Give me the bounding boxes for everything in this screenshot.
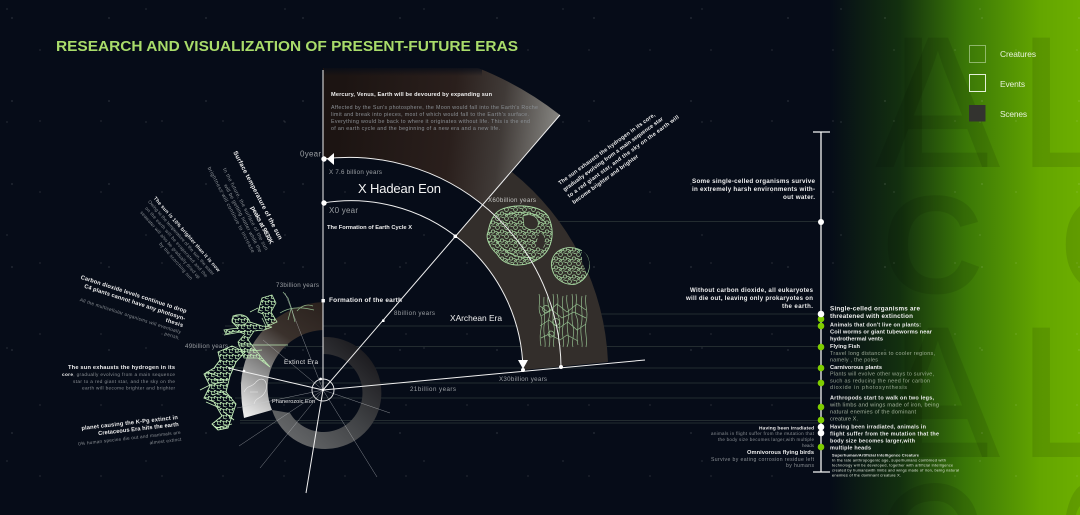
rotated note: sun temperature: will be getting hotter while the (222, 183, 263, 254)
event: irradiated animals: multiple heads (830, 446, 871, 452)
legend: events: Events (1000, 79, 1025, 89)
scene: Archean band (455, 172, 608, 370)
event: superhuman: In the late anthropogenic age, superhumans combined with (832, 458, 946, 462)
rotated note: carbon dioxide: C4 plants cannot have any photosyn- (83, 284, 186, 322)
diagram labels: X30billion years (499, 376, 547, 383)
event: carnivorous plants: such as reducing the need for carbon (830, 378, 930, 384)
diagram labels: X Hadean Eon (358, 181, 441, 196)
event: irradiated animals: flight suffer from the mutation that the (830, 432, 939, 438)
event: single-celled extinction: threatened with extinction (830, 313, 913, 320)
diagram labels: The Formation of Earth Cycle X (327, 225, 412, 231)
rotated note: K-Pg extinction: planet causing the K-Pg extinct in (81, 415, 179, 432)
event: carnivorous plants: Plants will evolve other ways to survive, (830, 372, 934, 378)
Sun expansion scene text: Everything would be back to where it originates without life. This is the end (331, 119, 530, 125)
scene: Hadean sector (323, 68, 560, 205)
event: animals without plants: Animals that don't live on plants: (830, 322, 921, 328)
event: arthropods: with limbs and wings made of iron, being (829, 402, 939, 408)
timeline note: without carbon dioxide: the earth. (782, 303, 813, 310)
event: irradiated animals: Having been irradiated, animals in (830, 424, 927, 430)
scene: Phanerozoic ring, lower part (272, 337, 381, 449)
background watermark letters: C (882, 166, 983, 323)
rotated note: brighter sun: on the earth will be evaporated and the (144, 206, 209, 279)
diagram labels: Extinct Era (284, 359, 318, 366)
timeline arcs (323, 157, 561, 367)
Sun expansion scene text: of an earth cycle and the beginning of a new era and a new life. (331, 126, 500, 132)
rotated note: K-Pg extinction (76, 415, 182, 453)
diagram labels: Formation of the earth (329, 297, 402, 304)
note: hydrogen exhausted, left: star to a red giant star, and the sky on the (73, 379, 175, 384)
event: superhuman: Superhuman/Artificial Intelligence Creature (832, 452, 920, 458)
legend: scenes: Scenes (1000, 109, 1027, 119)
legend (969, 46, 1036, 122)
event: animals without plants: Coil worms or giant tubeworms near (830, 330, 933, 336)
diagram labels: X 7.6 billion years (329, 169, 382, 176)
rotated note: brighter sun: The sun is 10% brighter than it is now (152, 196, 221, 273)
background watermark letters: A (875, 0, 1001, 207)
Sun expansion scene text: limit and break into pieces, most of which would fall to the Earth's surface. (331, 112, 529, 118)
event: single-celled extinction (830, 306, 920, 320)
rotated note: brighter sun: Owing to the temperature of the sun, the water (147, 199, 216, 277)
rotated note: K-Pg extinction: 0% human species die out and mammals are (78, 430, 181, 446)
rotated note: brighter sun: by the scorching sun (158, 241, 194, 281)
timeline note: irradiated flying animals and birds (711, 426, 815, 469)
event: carnivorous plants (830, 365, 934, 391)
background watermark letters: L (889, 0, 994, 207)
event: arthropods: Arthropods start to walk on two legs, (830, 396, 934, 402)
event: flying fish: namely , the poles (830, 358, 878, 364)
timeline note: irradiated flying animals and birds: Omnivorous flying birds (747, 450, 814, 456)
event: superhuman (832, 452, 959, 478)
diagram labels: 8billion years (394, 310, 435, 317)
diagram labels: X60billion years (488, 197, 536, 204)
event: arthropods (829, 396, 939, 422)
rotated note: sun temperature: brightness will continue to increase (206, 166, 256, 254)
rotated note: brighter sun (132, 195, 221, 290)
rotated note: sun temperature: peaks at 9830K (249, 205, 275, 246)
diagram labels (185, 150, 547, 405)
timeline note: irradiated flying animals and birds: the body size becomes larger,with multiple (718, 437, 814, 442)
rotated note: sun temperature (205, 150, 285, 258)
timeline note: without carbon dioxide: Without carbon dioxide, all eukaryotes (690, 287, 814, 294)
event: superhuman: enemies of the dominant creature X. (832, 472, 901, 478)
event: irradiated animals (830, 424, 939, 452)
rotated note: K-Pg extinction: almost extinct (149, 437, 182, 445)
event: animals without plants: hydrothermal vents (830, 336, 883, 342)
Sun expansion scene text: Mercury, Venus, Earth will be devoured by expanding sun (331, 92, 493, 98)
diagram labels: XArchean Era (450, 313, 502, 323)
Sun expansion scene text (331, 92, 538, 132)
rotated note: hydrogen exhausted, right: gradually evolving from a main sequence star (562, 116, 665, 193)
background watermark letters: A (875, 287, 1001, 497)
diagram labels: 73billion years (276, 282, 319, 289)
rotated note: hydrogen exhausted, right: to a red giant star, and the sky on the earth will (567, 114, 681, 199)
timeline note: without carbon dioxide (685, 287, 814, 310)
timeline note: irradiated flying animals and birds: Having been irradiated (759, 426, 814, 432)
creature: small upper dinosaur (250, 295, 277, 326)
creature: predator (224, 315, 288, 367)
diagram labels: 21billion years (410, 386, 456, 393)
event: animals without plants (830, 322, 933, 342)
event: single-celled extinction: Single-celled organisms are (830, 306, 920, 312)
rotated note: carbon dioxide (72, 275, 189, 341)
vertical timeline (813, 132, 830, 472)
creature: large cell (487, 206, 552, 265)
timeline note: single-celled survive: Some single-celled organisms survive (692, 178, 815, 185)
timeline note: irradiated flying animals and birds: heads (802, 443, 815, 448)
rotated note: carbon dioxide: perish. (164, 331, 181, 341)
note: hydrogen exhausted, left: The sun exhausts the hydrogen in its (68, 365, 175, 371)
event: arthropods: natural enemies of the dominant (830, 410, 916, 416)
diagram labels: 0year (300, 150, 321, 158)
rotated note: carbon dioxide: Carbon dioxide levels continue to drop (80, 275, 188, 315)
Sun expansion scene text: Affected by the Sun's photosphere, the Moon would fall into the Earth's Roche (331, 105, 538, 111)
timeline note: irradiated flying animals and birds: Survive by eating corrosion residue left (711, 457, 815, 463)
diagram labels: Phanerozoic Eon (272, 399, 315, 405)
time rays (228, 70, 645, 493)
timeline note: single-celled survive (692, 178, 815, 201)
note: hydrogen exhausted, left: earth will become brighter and brighter (82, 386, 175, 390)
horizontal connector lines (225, 222, 821, 423)
background watermark letters (875, 0, 1080, 515)
timeline note: single-celled survive: in extremely harsh environments with- (692, 186, 815, 193)
timeline note: irradiated flying animals and birds: by humans (786, 463, 814, 469)
event: carnivorous plants: dioxide in photosynthesis (830, 385, 907, 391)
event: superhuman: technology will be developed, together with artificial intelligence (832, 464, 953, 468)
rotated note: hydrogen exhausted, right: The sun exhausts the hydrogen in its core, (558, 112, 657, 187)
event: flying fish (830, 344, 936, 364)
creature: small cell (551, 248, 589, 284)
diagram labels: X0 year (329, 206, 358, 215)
rotated note: sun temperature: In the future, the surface of the sun (221, 167, 269, 252)
event: superhuman: created by humanswith limbs and wings made of iron, being natural (832, 468, 959, 472)
rotated note: hydrogen exhausted, right: become brighter and brighter (572, 153, 641, 206)
event: arthropods: creature X. (830, 416, 858, 422)
rotated note: sun temperature: Surface temperature of the sun (231, 150, 283, 241)
title: RESEARCH AND VISUALIZATION OF PRESENT-FUTURE ERAS (56, 39, 518, 55)
timeline dots (818, 219, 824, 450)
timeline note: irradiated flying animals and birds: animals in flight suffer from the mutation that (711, 431, 815, 436)
rotated note: carbon dioxide: thesis (165, 318, 184, 329)
event: irradiated animals: body size becomes larger,with (830, 438, 916, 444)
event: flying fish: Travel long distances to cooler regions, (830, 351, 936, 357)
event: carnivorous plants: Carnivorous plants (830, 365, 882, 371)
rotated note: brighter sun: seawater will also be gradually dried up (139, 210, 201, 280)
creature: armoured walker (200, 346, 245, 430)
diagram labels: 49billion years (185, 343, 228, 350)
creature: thin winged creature (280, 292, 314, 322)
note: hydrogen exhausted, left: core, gradually evolving from a main sequence (62, 372, 175, 377)
scene: Extinct era ring, bright part (241, 302, 323, 418)
right event column (829, 306, 959, 478)
timeline note: single-celled survive: out water. (783, 194, 815, 201)
background watermark letters: L (889, 287, 994, 497)
legend: creatures: Creatures (1000, 49, 1036, 59)
event: flying fish: Flying Fish (830, 344, 861, 350)
rotated note: K-Pg extinction: Cretaceous Era hits the earth (98, 422, 180, 437)
timeline note: without carbon dioxide: will die out, leaving only prokaryotes on (685, 295, 813, 302)
note: hydrogen exhausted, left (62, 365, 175, 390)
creature: faint fossil on ring (244, 379, 266, 404)
rotated note: carbon dioxide: All the multicellular organisms will eventually (79, 297, 182, 335)
creature: tube worms (539, 294, 587, 347)
diagram markers (243, 153, 563, 391)
